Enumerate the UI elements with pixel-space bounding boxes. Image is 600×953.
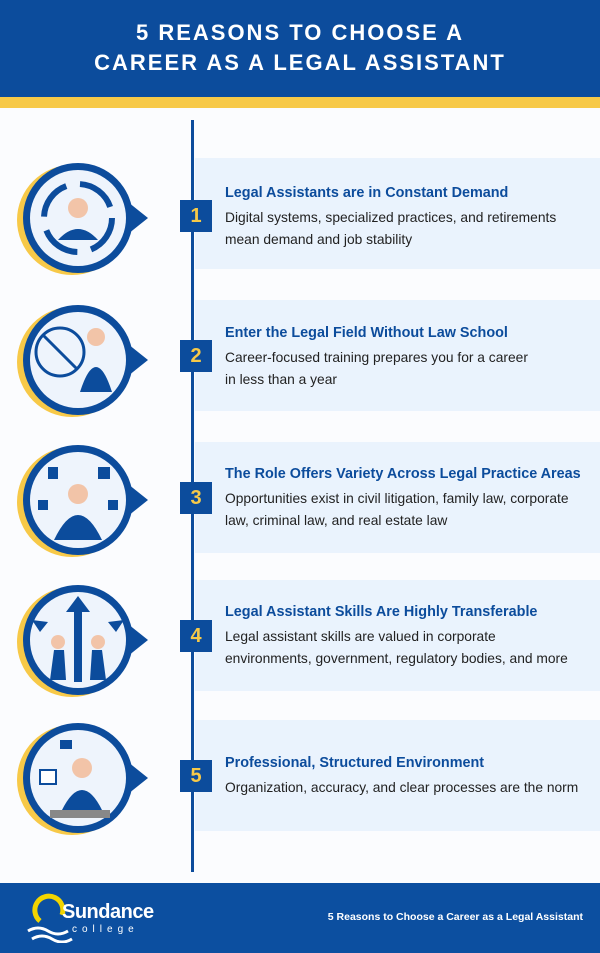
text 2: Career-focused training prepares you for a career xyxy=(225,350,528,365)
text 4 xyxy=(225,629,568,666)
footer text: 5 Reasons to Choose a Career as a Legal Assistant xyxy=(328,911,583,923)
number 4: 4 xyxy=(190,625,202,647)
number 1 xyxy=(180,200,212,232)
heading 3: The Role Offers Variety Across Legal Practice Areas xyxy=(225,466,581,482)
panel: reason 3 xyxy=(195,442,600,553)
number 1: 1 xyxy=(190,205,202,227)
panel: reason 1 xyxy=(195,158,600,269)
footer xyxy=(0,883,600,953)
number 3: 3 xyxy=(190,487,202,509)
number 4 xyxy=(180,620,212,652)
icon: reason 2 xyxy=(17,305,148,417)
number 5 xyxy=(180,760,212,792)
text 5: Organization, accuracy, and clear processes are the norm xyxy=(225,780,578,795)
logo xyxy=(27,894,154,943)
header: 5 REASONS TO CHOOSE A xyxy=(136,20,464,45)
icon: reason 3 xyxy=(17,445,148,557)
number 2 xyxy=(180,340,212,372)
number 5: 5 xyxy=(190,765,202,787)
panel: reason 4 xyxy=(195,580,600,691)
text 1 xyxy=(225,210,556,247)
text 2: in less than a year xyxy=(225,372,337,387)
heading 1: Legal Assistants are in Constant Demand xyxy=(225,185,508,201)
text 2 xyxy=(225,350,528,387)
icon: reason 4 xyxy=(17,585,148,697)
text 3: law, criminal law, and real estate law xyxy=(225,513,447,528)
icon: reason 5 xyxy=(17,723,148,835)
heading 4: Legal Assistant Skills Are Highly Transferable xyxy=(225,604,537,620)
panel: reason 5 xyxy=(195,720,600,831)
header: CAREER AS A LEGAL ASSISTANT xyxy=(94,50,506,75)
text 3: Opportunities exist in civil litigation, family law, corporate xyxy=(225,491,569,506)
text 4: environments, government, regulatory bodies, and more xyxy=(225,651,568,666)
heading 2: Enter the Legal Field Without Law School xyxy=(225,325,508,341)
icon: reason 1 xyxy=(17,163,148,275)
header xyxy=(0,0,600,97)
text 4: Legal assistant skills are valued in corporate xyxy=(225,629,496,644)
panel: reason 2 xyxy=(195,300,600,411)
heading 5: Professional, Structured Environment xyxy=(225,755,484,771)
text 1: Digital systems, specialized practices, and retirements xyxy=(225,210,556,225)
logo: Sundance xyxy=(62,901,154,923)
logo: college xyxy=(72,924,139,935)
text 1: mean demand and job stability xyxy=(225,232,412,247)
text 3 xyxy=(225,491,569,528)
number 2: 2 xyxy=(190,345,202,367)
number 3 xyxy=(180,482,212,514)
